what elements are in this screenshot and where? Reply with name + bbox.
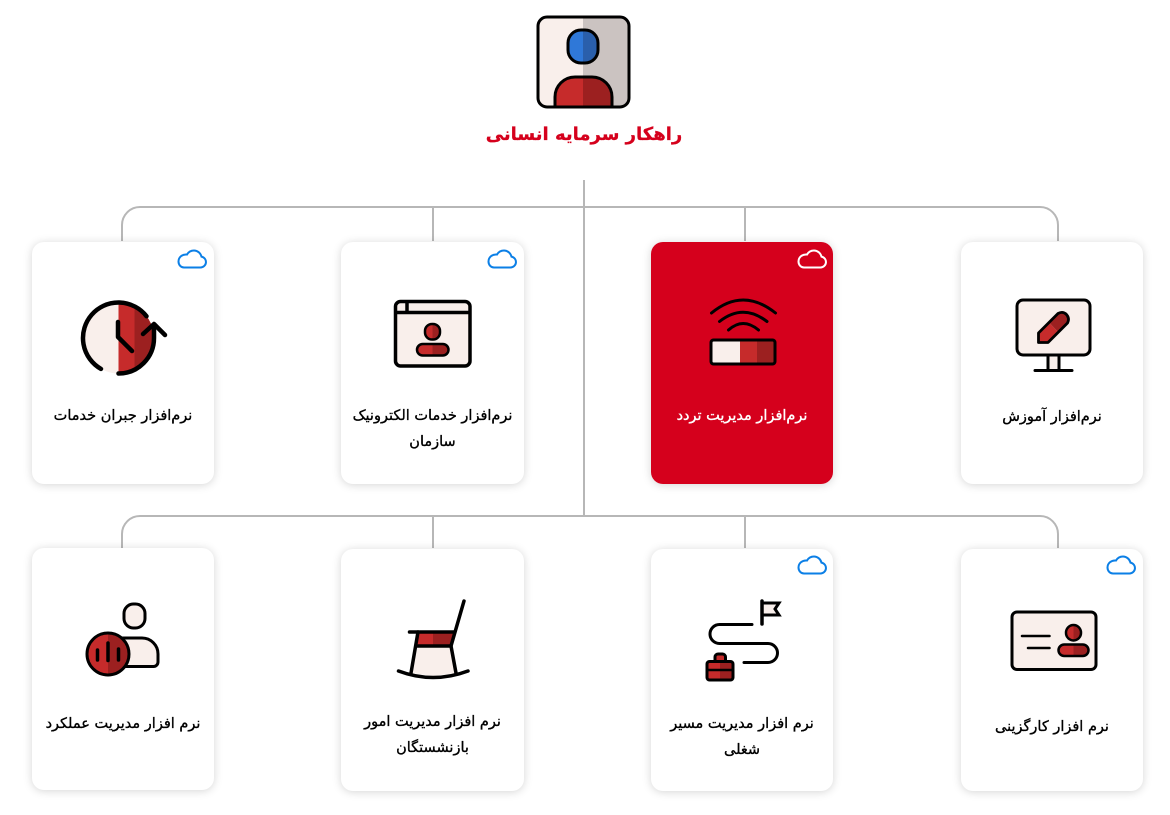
card: training software (961, 242, 1143, 484)
icon: browser window with user (394, 300, 472, 368)
label: نرم افزار مدیریت امور (364, 714, 501, 730)
card: performance software (32, 548, 214, 790)
header icon: person (536, 16, 630, 108)
label: سازمان (409, 434, 456, 450)
card: attendance software (highlighted) (651, 242, 833, 484)
label (669, 716, 814, 758)
icon: clock with arrow (80, 300, 168, 376)
label: نرم‌افزار خدمات الکترونیک (353, 408, 512, 424)
label (353, 408, 512, 450)
icon: cloud (1106, 556, 1136, 574)
title: راهکار سرمایه انسانی (486, 124, 682, 145)
icon: cloud (178, 250, 207, 268)
label: نرم‌افزار آموزش (1002, 409, 1102, 425)
icon: ID card (1010, 610, 1098, 671)
icon: cloud (798, 250, 827, 268)
icon: wireless device (710, 298, 778, 366)
label: نرم افزار کارگزینی (995, 719, 1109, 735)
card: e-services software (341, 242, 524, 484)
label: نرم افزار مدیریت مسیر (670, 716, 814, 732)
card: career path software (651, 549, 833, 791)
label: نرم‌افزار جبران خدمات (54, 408, 192, 424)
icon: career path with flag and briefcase (706, 599, 782, 682)
label: بازنشستگان (396, 740, 469, 756)
label: نرم‌افزار مدیریت تردد (677, 408, 807, 424)
label: شغلی (724, 742, 760, 758)
icon: cloud (488, 250, 517, 268)
card: compensation software (32, 242, 214, 484)
card: retirement software (341, 549, 524, 791)
icon: person with chart badge (86, 602, 160, 676)
icon: rocking chair (396, 599, 470, 680)
label (363, 714, 501, 756)
icon: cloud (798, 556, 827, 574)
label: نرم افزار مدیریت عملکرد (46, 716, 200, 732)
icon: monitor with pencil (1016, 298, 1092, 372)
card: recruitment software (961, 549, 1143, 791)
